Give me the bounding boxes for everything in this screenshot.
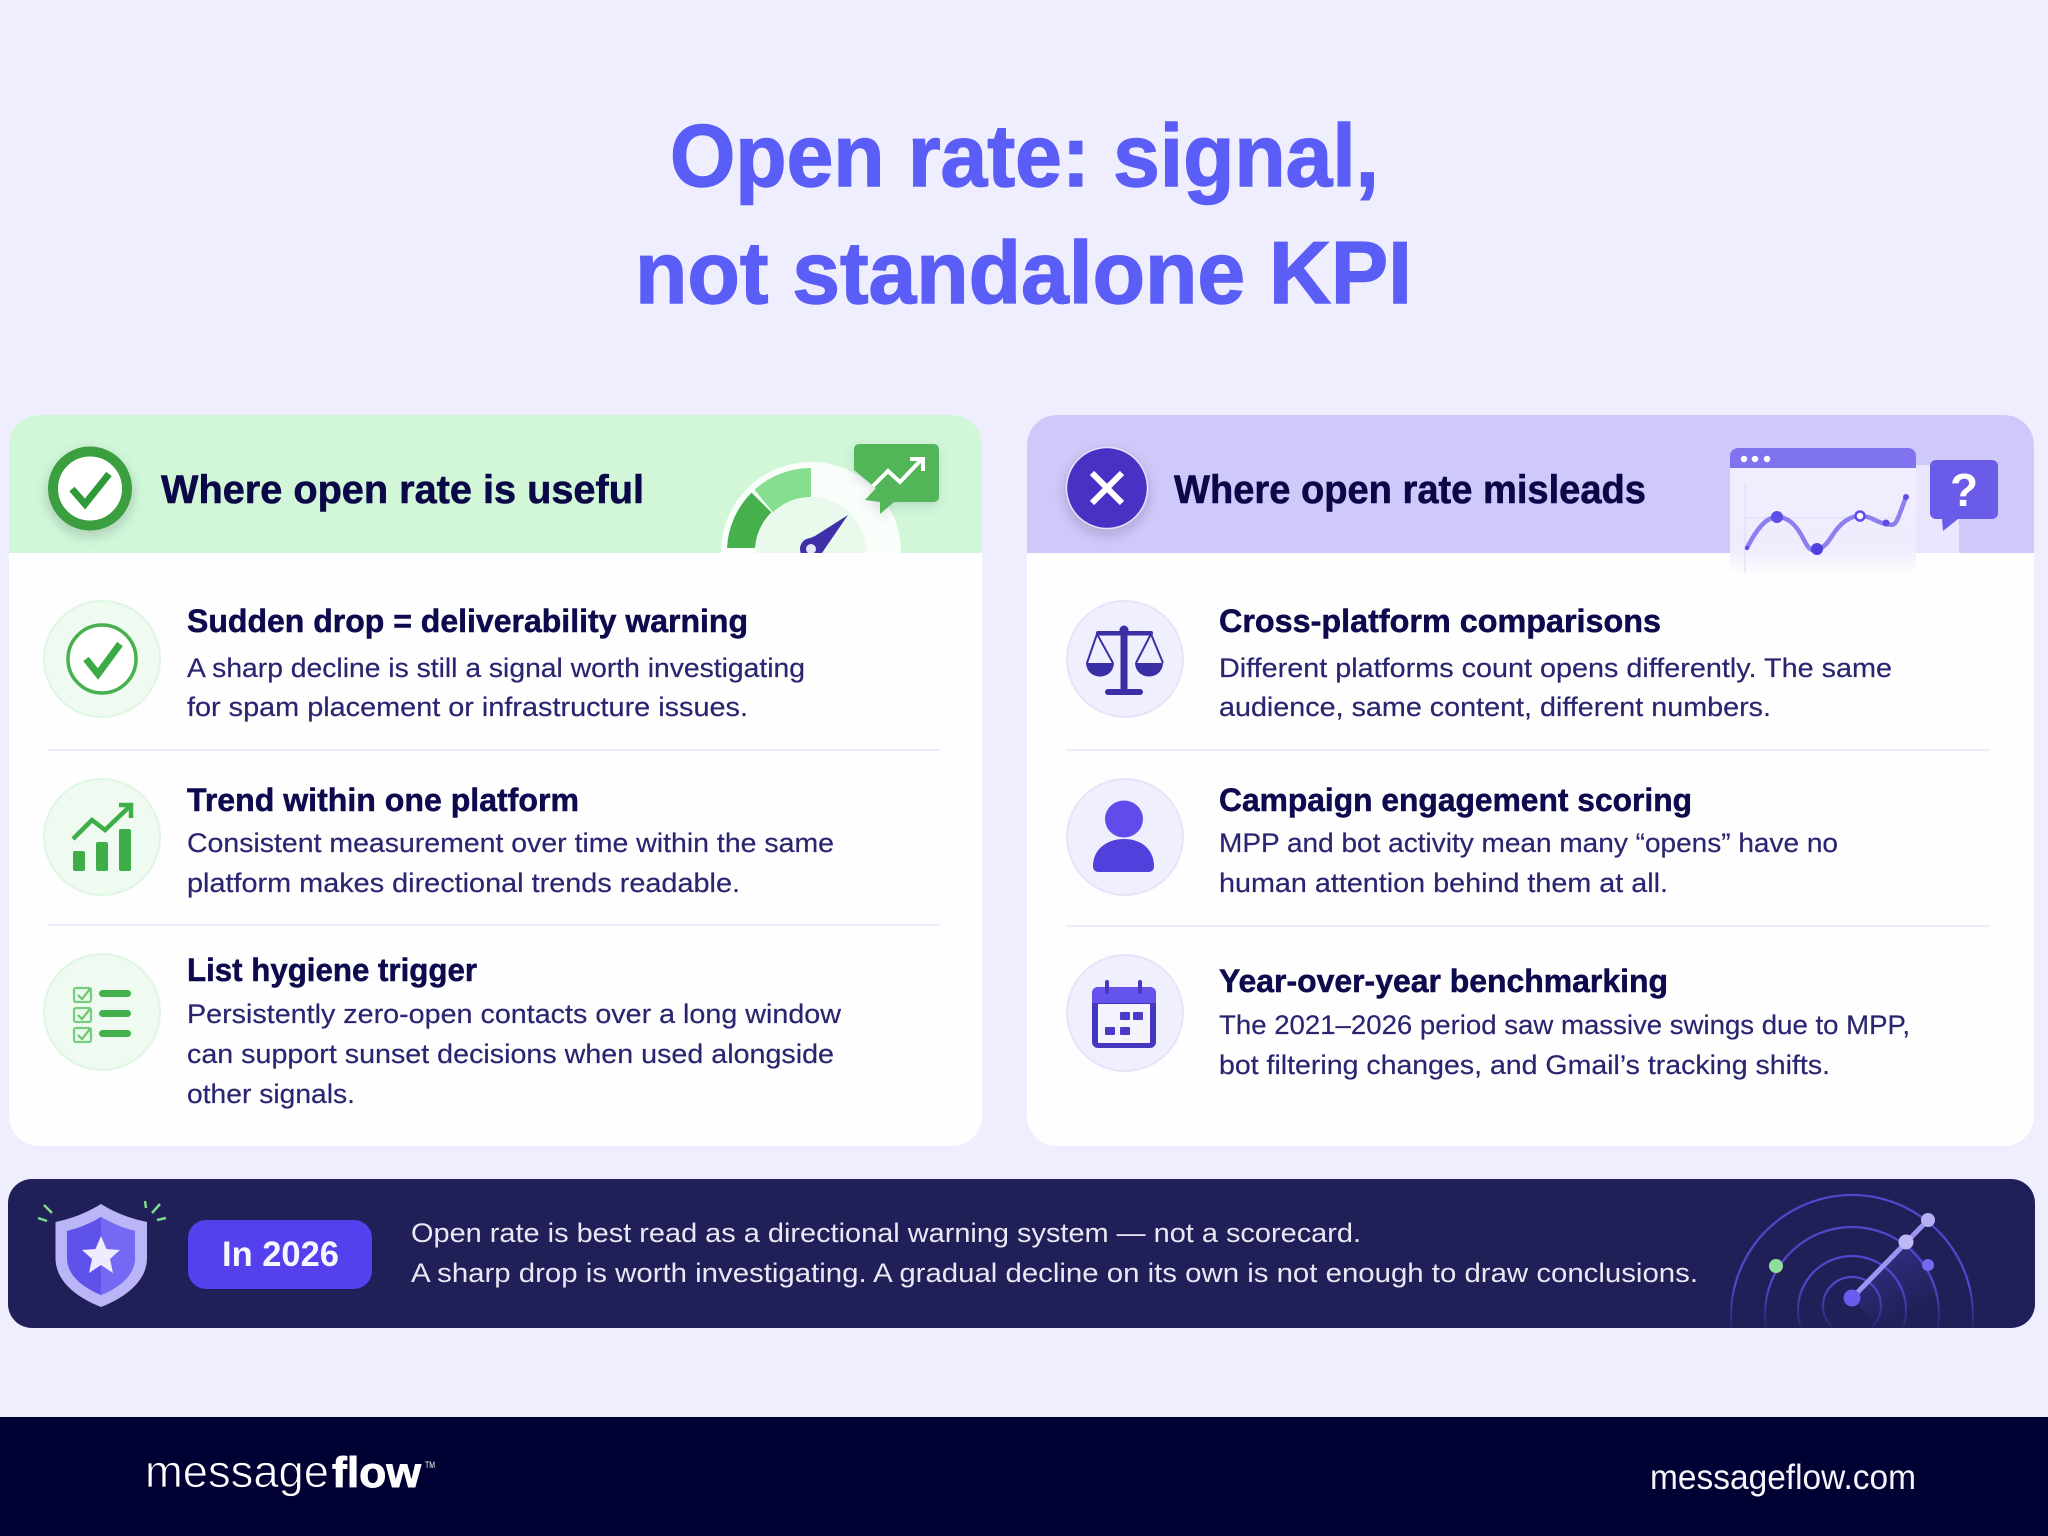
callout banner: in 2026 bbox=[8, 1179, 2035, 1328]
logo: messageflow: message bbox=[145, 1446, 329, 1497]
icon: green check badge bbox=[53, 452, 127, 526]
text: year-over-year: The 2021–2026 period saw massive swings due to MPP, bbox=[1219, 1010, 1910, 1040]
icon: check circle bbox=[44, 601, 160, 717]
item: trend within one platform bbox=[44, 779, 834, 898]
badge: in 2026 bbox=[188, 1220, 372, 1289]
callout text: Open rate is best read as a directional warning system — not a scorecard. bbox=[411, 1218, 1361, 1248]
logo: messageflow bbox=[145, 1446, 435, 1497]
text: campaign bbox=[1219, 782, 1838, 898]
text: cross-platform: audience, same content, different numbers. bbox=[1219, 692, 1771, 722]
item: campaign engagement scoring bbox=[1067, 779, 1838, 898]
text: trend bbox=[187, 782, 834, 898]
text: campaign: Campaign engagement scoring bbox=[1219, 782, 1692, 818]
icon: shield with star bbox=[38, 1201, 166, 1307]
illustration: radar bbox=[1730, 1194, 1974, 1328]
title: Open rate: signal, bbox=[670, 106, 1379, 205]
text: campaign: human attention behind them at all. bbox=[1219, 868, 1668, 898]
text: trend: Trend within one platform bbox=[187, 782, 579, 818]
title: not standalone KPI bbox=[635, 223, 1412, 322]
text: year-over-year: bot filtering changes, and Gmail’s tracking shifts. bbox=[1219, 1050, 1830, 1080]
text: sudden drop bbox=[187, 603, 805, 722]
text: year-over-year bbox=[1219, 963, 1910, 1080]
text: cross-platform: Cross-platform comparisons bbox=[1219, 603, 1661, 639]
text: list hygiene: other signals. bbox=[187, 1079, 355, 1109]
text: cross-platform: Different platforms count opens differently. The same bbox=[1219, 653, 1892, 683]
icon: x badge bbox=[1066, 448, 1148, 528]
panel header: misleads bbox=[1027, 415, 2034, 573]
text: list hygiene bbox=[187, 952, 842, 1109]
callout text bbox=[411, 1218, 1698, 1288]
icon: balance scale bbox=[1067, 601, 1183, 717]
illustration: gauge with trend bubble bbox=[721, 444, 942, 553]
icon: person bbox=[1067, 779, 1183, 895]
heading: where open rate is useful: Where open rate is useful bbox=[161, 468, 644, 512]
text: sudden drop: for spam placement or infrastructure issues. bbox=[187, 692, 748, 722]
text: list hygiene: can support sunset decisions when used alongside bbox=[187, 1039, 834, 1069]
text: list hygiene: List hygiene trigger bbox=[187, 952, 477, 988]
text: trend: platform makes directional trends readable. bbox=[187, 868, 740, 898]
panel header: useful bbox=[9, 415, 982, 553]
icon: checklist bbox=[44, 954, 160, 1070]
text: trend: Consistent measurement over time within the same bbox=[187, 828, 834, 858]
footer bar bbox=[0, 1417, 2048, 1536]
title bbox=[635, 106, 1412, 322]
text: sudden drop: A sharp decline is still a signal worth investigating bbox=[187, 653, 805, 683]
item: cross-platform comparisons bbox=[1067, 601, 1892, 722]
item: year-over-year benchmarking bbox=[1067, 955, 1910, 1080]
heading: where open rate misleads: Where open rate misleads bbox=[1174, 468, 1646, 512]
text: list hygiene: Persistently zero-open contacts over a long window bbox=[187, 999, 842, 1029]
illustration: chart window with question bubble: ? bbox=[1950, 464, 1978, 516]
panel: where open rate is useful bbox=[9, 415, 982, 1146]
website url: messageflow.com bbox=[1650, 1458, 1916, 1497]
illustration: chart window with question bubble bbox=[1730, 448, 1998, 573]
logo: messageflow: TM bbox=[425, 1460, 435, 1470]
text: cross-platform bbox=[1219, 603, 1892, 722]
badge: in 2026: In 2026 bbox=[222, 1235, 339, 1274]
text: year-over-year: Year-over-year benchmarking bbox=[1219, 963, 1668, 999]
item: list hygiene trigger bbox=[44, 952, 842, 1109]
callout text: A sharp drop is worth investigating. A gradual decline on its own is not enough to draw conclusions. bbox=[411, 1258, 1698, 1288]
icon: bar chart with arrow bbox=[44, 779, 160, 895]
text: sudden drop: Sudden drop = deliverability warning bbox=[187, 603, 748, 639]
text: campaign: MPP and bot activity mean many “opens” have no bbox=[1219, 828, 1838, 858]
icon: calendar bbox=[1067, 955, 1183, 1071]
item: sudden drop bbox=[44, 601, 805, 722]
panel: where open rate misleads bbox=[1027, 415, 2034, 1146]
logo: messageflow: flow bbox=[332, 1449, 422, 1497]
